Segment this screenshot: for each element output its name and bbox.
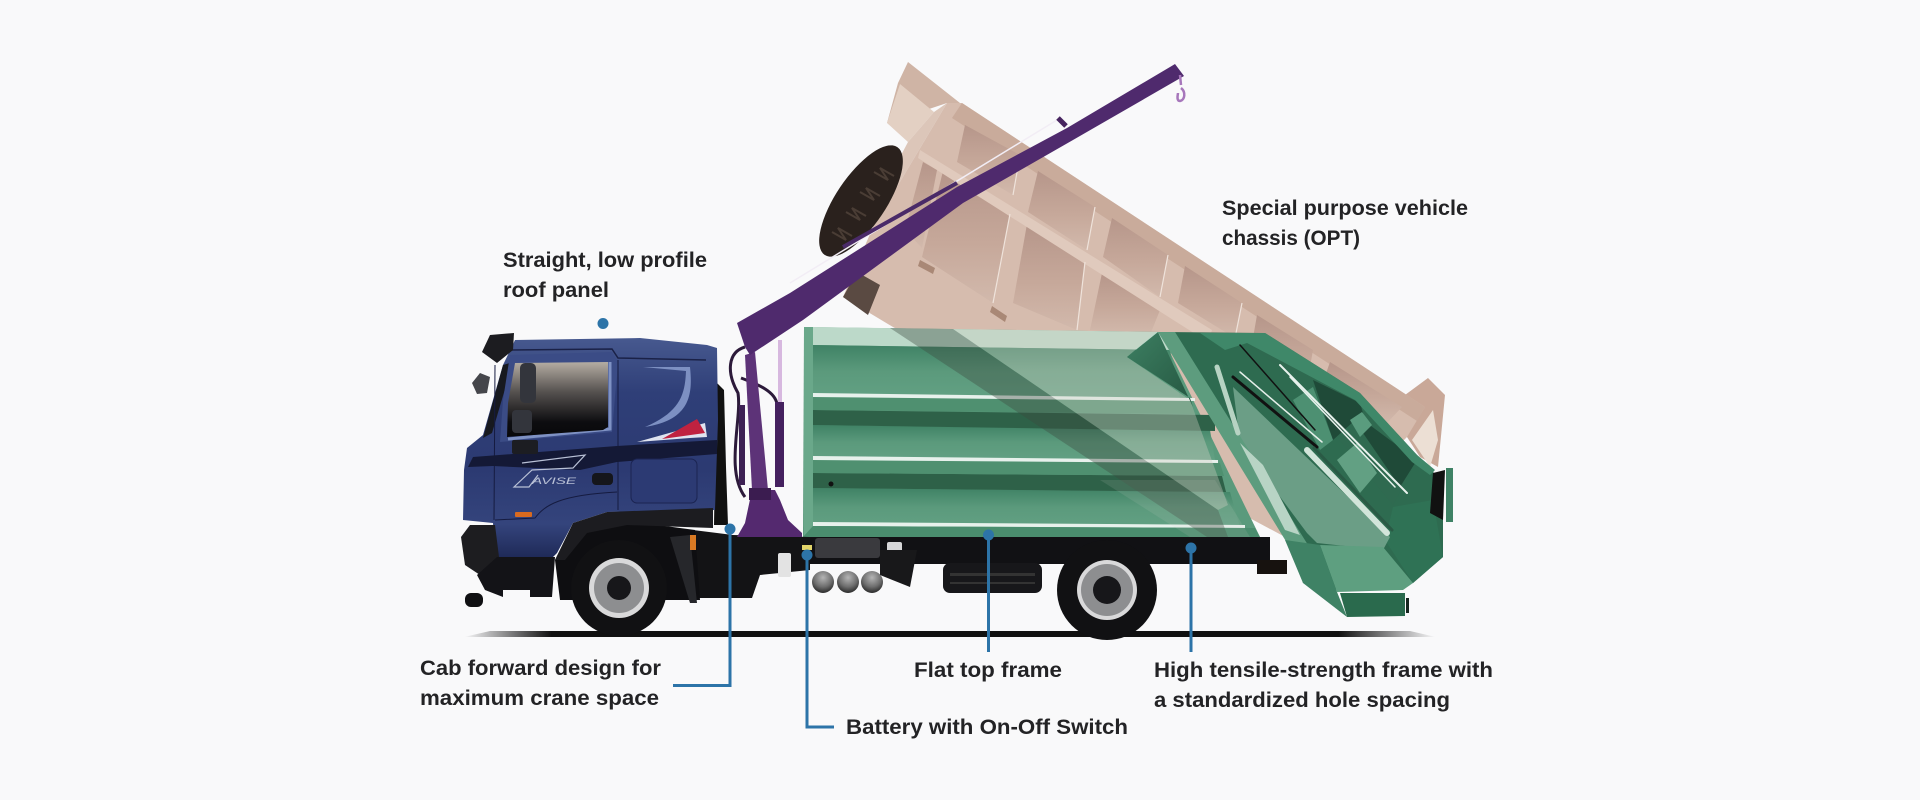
tire tread	[832, 168, 894, 240]
white filter	[887, 542, 902, 557]
red decal	[662, 419, 705, 439]
hopper underside	[1285, 540, 1347, 617]
headboard	[873, 62, 960, 227]
sun visor	[482, 333, 514, 363]
air tanks	[812, 571, 883, 593]
extension rod	[790, 118, 1066, 283]
side panel	[631, 459, 697, 503]
spare wheel under frame	[943, 563, 1042, 593]
window frame	[500, 352, 618, 442]
rear bracket	[1430, 468, 1453, 522]
top rail	[952, 103, 1425, 421]
orange marker	[690, 535, 696, 550]
translucent dump body overlay	[890, 328, 1250, 537]
callout: special purpose chassis: Special purpose vehicle	[1222, 197, 1468, 220]
rear wall	[714, 383, 728, 525]
door seams	[494, 360, 618, 520]
callout: special purpose chassis: chassis (OPT)	[1222, 227, 1360, 250]
windshield edge	[483, 362, 513, 438]
fuel and battery box	[815, 538, 880, 558]
hopper floor	[1320, 545, 1413, 592]
cab	[461, 333, 728, 607]
top light band	[813, 327, 1170, 350]
callout: cab forward design: maximum crane space	[420, 687, 659, 710]
callout: high tensile frame	[1154, 542, 1493, 712]
tailgate hinge	[1405, 378, 1445, 467]
rear equipment	[880, 550, 917, 587]
callout: cab forward design	[420, 524, 736, 710]
hook	[1178, 75, 1184, 101]
hoses	[730, 347, 777, 497]
swoosh trim	[643, 367, 691, 427]
window highlight	[508, 362, 610, 439]
panels	[813, 345, 1240, 527]
wheel arch shadow	[555, 520, 700, 600]
callout: flat top frame	[914, 530, 1062, 682]
cab shell	[463, 338, 718, 557]
callout: battery: Battery with On-Off Switch	[846, 716, 1128, 739]
front wheel	[571, 540, 667, 636]
wing mirror	[472, 373, 490, 394]
rim	[1200, 333, 1435, 475]
dump body chassis option	[843, 62, 1445, 545]
horizontal rib	[918, 150, 1212, 342]
spare tire	[804, 133, 918, 269]
chassis frame	[690, 530, 1287, 598]
green compactor body	[803, 327, 1260, 537]
white decal	[637, 423, 707, 442]
outer cylinder	[739, 405, 745, 485]
tow hook	[465, 593, 483, 607]
callout: flat top frame: Flat top frame	[914, 659, 1062, 682]
underside shadow	[843, 272, 880, 315]
pillar	[745, 352, 768, 490]
callout: high tensile frame: a standardized hole spacing	[1154, 689, 1450, 712]
panels	[905, 125, 1402, 425]
wedge	[1127, 332, 1193, 407]
boom	[737, 64, 1184, 355]
rib highlights	[993, 155, 1242, 338]
callout: straight roof panel: Straight, low profile	[503, 249, 707, 272]
blocks	[1247, 343, 1443, 583]
roof shadow	[510, 349, 706, 360]
side repeater	[515, 512, 532, 517]
logo	[514, 455, 585, 487]
hopper interior	[1165, 332, 1443, 590]
callout: battery	[802, 550, 1128, 739]
window glass	[507, 362, 608, 437]
callout: straight roof panel	[503, 249, 707, 329]
front post	[804, 327, 813, 537]
door mirror	[512, 363, 538, 454]
door handle	[592, 473, 613, 485]
diagonal strut	[1158, 332, 1313, 553]
ground shadow	[464, 631, 1436, 637]
bumper	[461, 525, 500, 580]
callout: straight roof panel: roof panel	[503, 279, 609, 302]
fender	[555, 508, 713, 560]
crane	[730, 64, 1184, 537]
logo: AVISE	[530, 476, 577, 487]
rib feet	[918, 260, 1007, 322]
body shell	[843, 103, 1425, 545]
body stripe	[468, 440, 717, 470]
light translucent zone	[1233, 387, 1390, 550]
mudguard	[670, 535, 697, 603]
hydraulic cylinders	[1217, 345, 1407, 533]
rear wheel	[1057, 540, 1157, 640]
shelves and shadows	[803, 393, 1260, 537]
yellow battery switch	[802, 545, 812, 550]
base	[737, 488, 802, 537]
lift cylinder	[775, 340, 784, 487]
rear compactor hopper	[1127, 332, 1453, 617]
callout: high tensile frame: High tensile-strength frame with	[1154, 659, 1493, 682]
callout: special purpose chassis	[1222, 197, 1468, 250]
tail plate	[1340, 593, 1405, 617]
callout: cab forward design: Cab forward design for	[420, 657, 661, 680]
small bolt	[828, 482, 834, 486]
step	[477, 557, 555, 597]
